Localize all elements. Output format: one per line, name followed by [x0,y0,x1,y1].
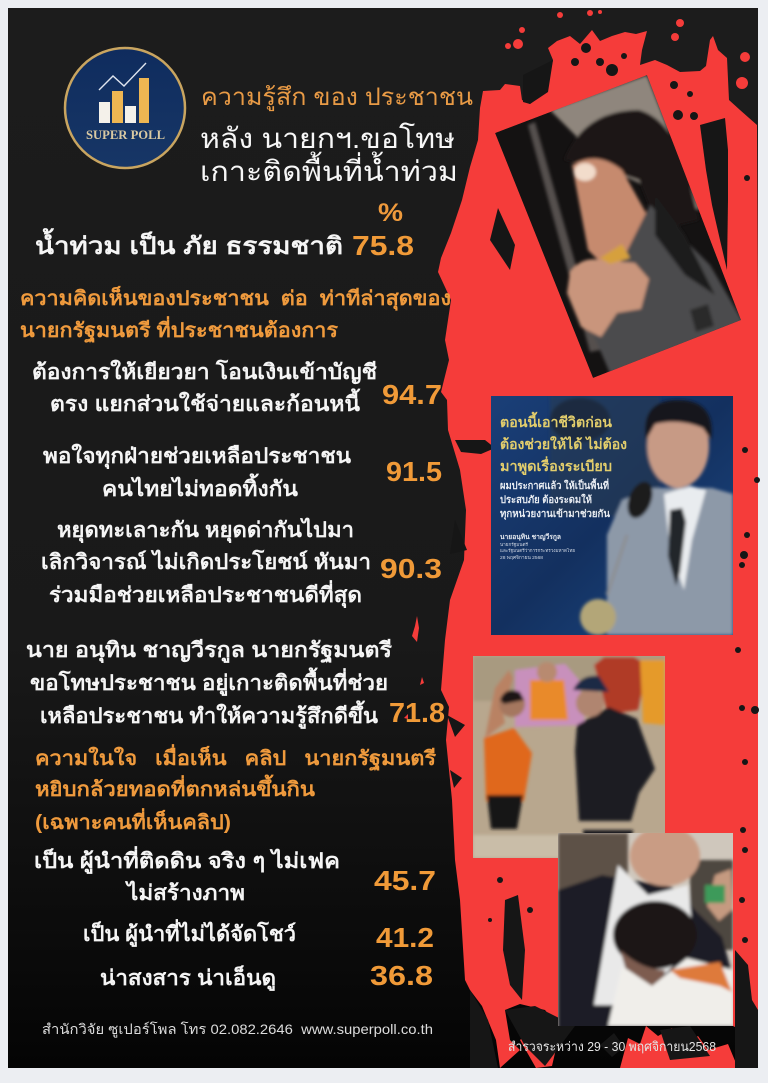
item: PM apology 71.8 [26,638,445,730]
item: all sides helping 91.5: คนไทยไม่ทอดทิ้งกัน [102,473,299,501]
item: stop quarrelling 90.3: หยุดทะเลาะกัน หยุดด่ากันไปมา [57,517,354,544]
item: no show 41.2 [83,918,434,953]
card text: ประสบภัย ต้องระดมให้ [500,493,592,506]
title line 2: หลัง นายกฯ.ขอโทษ [200,122,455,154]
card text: ต้องช่วยให้ได้ ไม่ต้อง [500,435,627,452]
card text: มาพูดเรื่องระเบียบ [500,456,612,475]
item: no show 41.2: 41.2 [376,922,434,953]
photo: PM comforting [558,826,733,1036]
item: stop quarrelling 90.3: เลิกวิจารณ์ ไม่เกิดประโยชน์ หันมา [41,549,371,574]
headline stat: natural disaster: น้ำท่วม เป็น ภัย ธรรมชาติ [35,227,343,260]
item: stop quarrelling 90.3: ร่วมมือช่วยเหลือประชาชนดีที่สุด [49,579,362,609]
logo arrow [99,63,146,90]
headline stat: natural disaster: 75.8 [352,230,414,261]
photo: flood visit [473,656,665,858]
item: down to earth 45.7: เป็น ผู้นำที่ติดดิน จริง ๆ ไม่เฟค [34,845,340,875]
title line 3: เกาะติดพื้นที่น้ำท่วม [200,151,458,187]
section heading: clip reaction: ความในใจ เมื่อเห็น คลิป นายกรัฐมนตรี [35,743,436,772]
card text: ผมประกาศแล้ว ให้เป็นพื้นที่ [500,478,609,492]
item: PM apology 71.8: เหลือประชาชน ทำให้ความรู้สึกดีขึ้น [40,700,379,730]
card text: นายกรัฐมนตรี [500,542,529,548]
title [200,84,473,187]
item: all sides helping 91.5 [43,443,442,501]
card text: นายอนุทิน ชาญวีรกูล [500,533,561,542]
section heading: clip reaction [35,743,436,834]
card text: ตอนนี้เอาชีวิตก่อน [500,411,612,430]
footer: survey dates: สำรวจระหว่าง 29 - 30 พฤศจิกายน2568 [508,1039,716,1054]
section heading: public opinion [20,285,451,344]
item: pitiful 36.8: น่าสงสาร น่าเอ็นดู [100,964,276,992]
item: compensation 94.7: ต้องการให้เยียวยา โอนเงินเข้าบัญชี [32,359,377,385]
logo bars [99,78,149,123]
item: stop quarrelling 90.3: 90.3 [380,553,442,584]
section heading: public opinion: ความคิดเห็นของประชาชน ต่อ ท่าทีล่าสุดของ [20,285,451,311]
title line: orange: ความรู้สึก ของ ประชาชน [201,84,473,112]
item: PM apology 71.8: นาย อนุทิน ชาญวีรกูล นายกรัฐมนตรี [26,638,393,664]
item: compensation 94.7: 94.7 [382,379,442,410]
item: compensation 94.7: ตรง แยกส่วนใช้จ่ายและก้อนหนี้ [50,388,361,416]
section heading: public opinion: นายกรัฐมนตรี ที่ประชาชนต้องการ [20,315,338,344]
card text: 28 พฤศจิกายน 2568 [500,555,544,560]
item: all sides helping 91.5: พอใจทุกฝ่ายช่วยเหลือประชาชน [43,443,352,470]
item: down to earth 45.7: 45.7 [374,865,436,896]
red paint splash [404,10,758,1068]
logo name: SUPER POLL [86,127,165,142]
item: PM apology 71.8: 71.8 [389,697,445,728]
item: stop quarrelling 90.3 [41,517,442,609]
logo: Super Poll badge [65,48,185,168]
item: down to earth 45.7 [34,845,436,905]
card text: ทุกหน่วยงานเข้ามาช่วยกัน [500,508,610,520]
card text [500,411,627,560]
item: no show 41.2: เป็น ผู้นำที่ไม่ได้จัดโชว์ [83,918,296,948]
black paint speckles on red [447,43,760,1068]
card text: และรัฐมนตรีว่าการกระทรวงมหาดไทย [500,548,575,554]
item: pitiful 36.8: 36.8 [370,960,433,991]
footer: contact line: สำนักวิจัย ซูเปอร์โพล โทร 02.082.2646 www.superpoll.co.th [42,1021,433,1038]
item: PM apology 71.8: ขอโทษประชาชน อยู่เกาะติดพื้นที่ช่วย [30,667,388,697]
item: compensation 94.7 [32,359,442,416]
photo: PM eating [495,75,745,385]
headline stat: natural disaster [35,227,414,261]
item: pitiful 36.8 [100,960,433,992]
section heading: clip reaction: หยิบกล้วยทอดที่ตกหล่นขึ้นกิน [35,774,315,801]
section heading: clip reaction: (เฉพาะคนที่เห็นคลิป) [35,807,231,834]
photo: statement card [491,396,733,635]
item: all sides helping 91.5: 91.5 [386,456,442,487]
percent sign: % [378,199,403,227]
item: down to earth 45.7: ไม่สร้างภาพ [125,880,245,905]
